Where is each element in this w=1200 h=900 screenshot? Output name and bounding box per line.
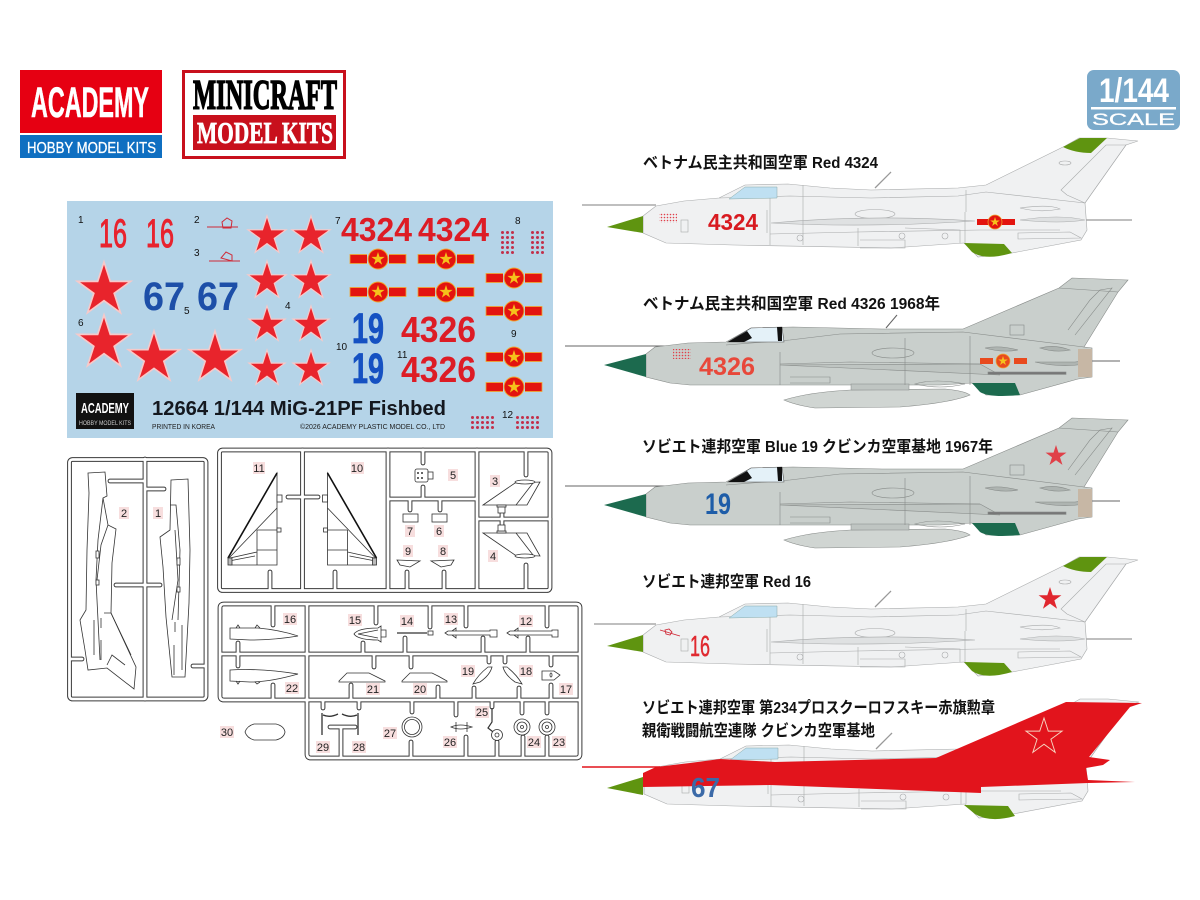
decals: canopy emblems — [207, 218, 240, 261]
aircraft: Red 4324: 4324 — [708, 209, 758, 235]
part number labels: 12 — [520, 616, 532, 628]
part number labels: 6 — [436, 526, 442, 538]
aircraft: Blue 19: 19 — [705, 488, 731, 521]
logo: small Academy: ACADEMY — [81, 400, 129, 417]
decals: 67 — [143, 275, 239, 319]
part number labels: 7 — [407, 526, 413, 538]
heading: 234th regiment line 1: ソビエト連邦空軍 第234プロスクーロフスキー赤旗勲章 — [642, 698, 995, 717]
part 30 — [245, 724, 285, 740]
decal numbers: 10 — [336, 342, 348, 353]
part number labels: 16 — [284, 614, 296, 626]
logo: small Academy: HOBBY MODEL KITS — [79, 420, 132, 427]
aircraft: Red 4326 — [565, 278, 1128, 408]
part number labels: 1 — [155, 508, 161, 520]
aircraft: Red 67: 67 — [691, 772, 720, 803]
parts: tailplanes 3 and 4 — [483, 480, 540, 558]
logo: Academy: HOBBY MODEL KITS — [27, 140, 156, 157]
heading: Red 4326 1968: ベトナム民主共和国空軍 Red 4326 1968年 — [643, 294, 940, 313]
part number labels: 11 — [253, 463, 265, 475]
badge: 1/144 scale — [1087, 70, 1180, 130]
logo: Minicraft — [184, 72, 344, 158]
parts: drop tanks 16 and 22 — [230, 625, 298, 684]
part number labels: 18 — [520, 666, 532, 678]
part number labels: 28 — [353, 742, 365, 754]
logo: Academy — [20, 70, 162, 158]
decal numbers: 9 — [511, 329, 517, 340]
decals: 67: 67 — [143, 275, 185, 319]
part number labels: 23 — [553, 737, 565, 749]
logo: small Academy — [76, 393, 134, 429]
panel: decal sheet — [67, 201, 553, 438]
parts 6 to 9 — [397, 514, 454, 567]
decal numbers — [78, 215, 521, 421]
heading: Red 16: ソビエト連邦空軍 Red 16 — [642, 572, 811, 591]
part number labels: 30 — [221, 727, 233, 739]
badge: 1/144 scale: 1/144 — [1099, 72, 1169, 110]
part number labels: 9 — [405, 546, 411, 558]
part number labels: 27 — [384, 728, 396, 740]
decals: 4326 — [401, 309, 476, 390]
aircraft: Red 67 — [582, 699, 1142, 819]
sprue frames — [70, 450, 580, 758]
part number labels: 5 — [450, 470, 456, 482]
decals: 19: 19 — [352, 345, 384, 393]
decals: 16: 16 — [146, 212, 174, 256]
decals: red stars — [77, 216, 330, 384]
logo: Minicraft: MODEL KITS — [197, 115, 333, 150]
decals: 67: 67 — [197, 275, 239, 319]
part number labels: 29 — [317, 742, 329, 754]
parts: landing gear and wheels 23 to 29 — [322, 708, 555, 740]
part number labels: 20 — [414, 684, 426, 696]
part number labels: 22 — [286, 683, 298, 695]
part number labels: 15 — [349, 615, 361, 627]
heading: Red 4324: ベトナム民主共和国空軍 Red 4324 — [643, 153, 878, 172]
decal numbers: 2 — [194, 215, 200, 226]
logo: Academy: ACADEMY — [31, 79, 149, 127]
logo: Minicraft: MINICRAFT — [193, 73, 337, 119]
part number labels: 4 — [490, 551, 496, 563]
parts: wings 11 and 10 — [228, 473, 376, 565]
part number labels: 8 — [440, 546, 446, 558]
decals: 4324 — [341, 211, 490, 248]
part number labels: 2 — [121, 508, 127, 520]
decal title: 12664 1/144 MiG-21PF Fishbed — [152, 398, 446, 420]
aircraft: Blue 19 — [565, 418, 1128, 548]
part number labels: 14 — [401, 616, 413, 628]
parts: fuselage halves — [80, 472, 190, 689]
parts: missiles and details 12 to 15 — [354, 626, 558, 642]
decal numbers: 7 — [335, 216, 341, 227]
decal numbers: 12 — [502, 410, 514, 421]
copyright: ©2026 ACADEMY PLASTIC MODEL CO., LTD — [300, 423, 445, 431]
decals: 4324: 4324 — [341, 211, 413, 248]
heading: Blue 19: ソビエト連邦空軍 Blue 19 クビンカ空軍基地 1967年 — [642, 437, 993, 456]
aircraft: Red 4326: 4326 — [699, 353, 755, 381]
part 5 — [415, 469, 433, 482]
decals: Vietnamese roundels — [350, 249, 542, 397]
aircraft: Red 16 — [594, 557, 1138, 676]
decals: 16 — [99, 212, 174, 256]
decal numbers: 1 — [78, 215, 84, 226]
part number labels: 17 — [560, 684, 572, 696]
decal numbers: 3 — [194, 248, 200, 259]
decals: 19: 19 — [352, 305, 384, 353]
decal numbers: 4 — [285, 301, 291, 312]
part number labels: 25 — [476, 707, 488, 719]
part number labels: 3 — [492, 476, 498, 488]
badge: 1/144 scale: SCALE — [1092, 110, 1175, 129]
parts: pylons and doors 17 to 21 — [339, 667, 560, 684]
decals: 4326: 4326 — [401, 309, 476, 350]
decals: 19 — [352, 305, 384, 393]
print note: PRINTED IN KOREA — [152, 424, 215, 431]
decal numbers: 6 — [78, 318, 84, 329]
part number labels: 24 — [528, 737, 540, 749]
aircraft: Red 4324 — [582, 138, 1138, 257]
aircraft: Red 16: 16 — [690, 631, 710, 663]
decals: 16: 16 — [99, 212, 127, 256]
part number labels: 10 — [351, 463, 363, 475]
decal numbers: 5 — [184, 306, 190, 317]
part number labels — [119, 462, 573, 754]
part number labels: 26 — [444, 737, 456, 749]
decal numbers: 11 — [397, 350, 408, 361]
decal numbers: 8 — [515, 216, 521, 227]
decals: 4324: 4324 — [418, 211, 490, 248]
decals: stencil dots — [470, 230, 545, 430]
part number labels: 21 — [367, 684, 379, 696]
part number labels: 19 — [462, 666, 474, 678]
heading: 234th regiment line 2: 親衛戦闘航空連隊 クビンカ空軍基地 — [642, 721, 875, 740]
part number labels: 13 — [445, 614, 457, 626]
decals: 4326: 4326 — [401, 349, 476, 390]
